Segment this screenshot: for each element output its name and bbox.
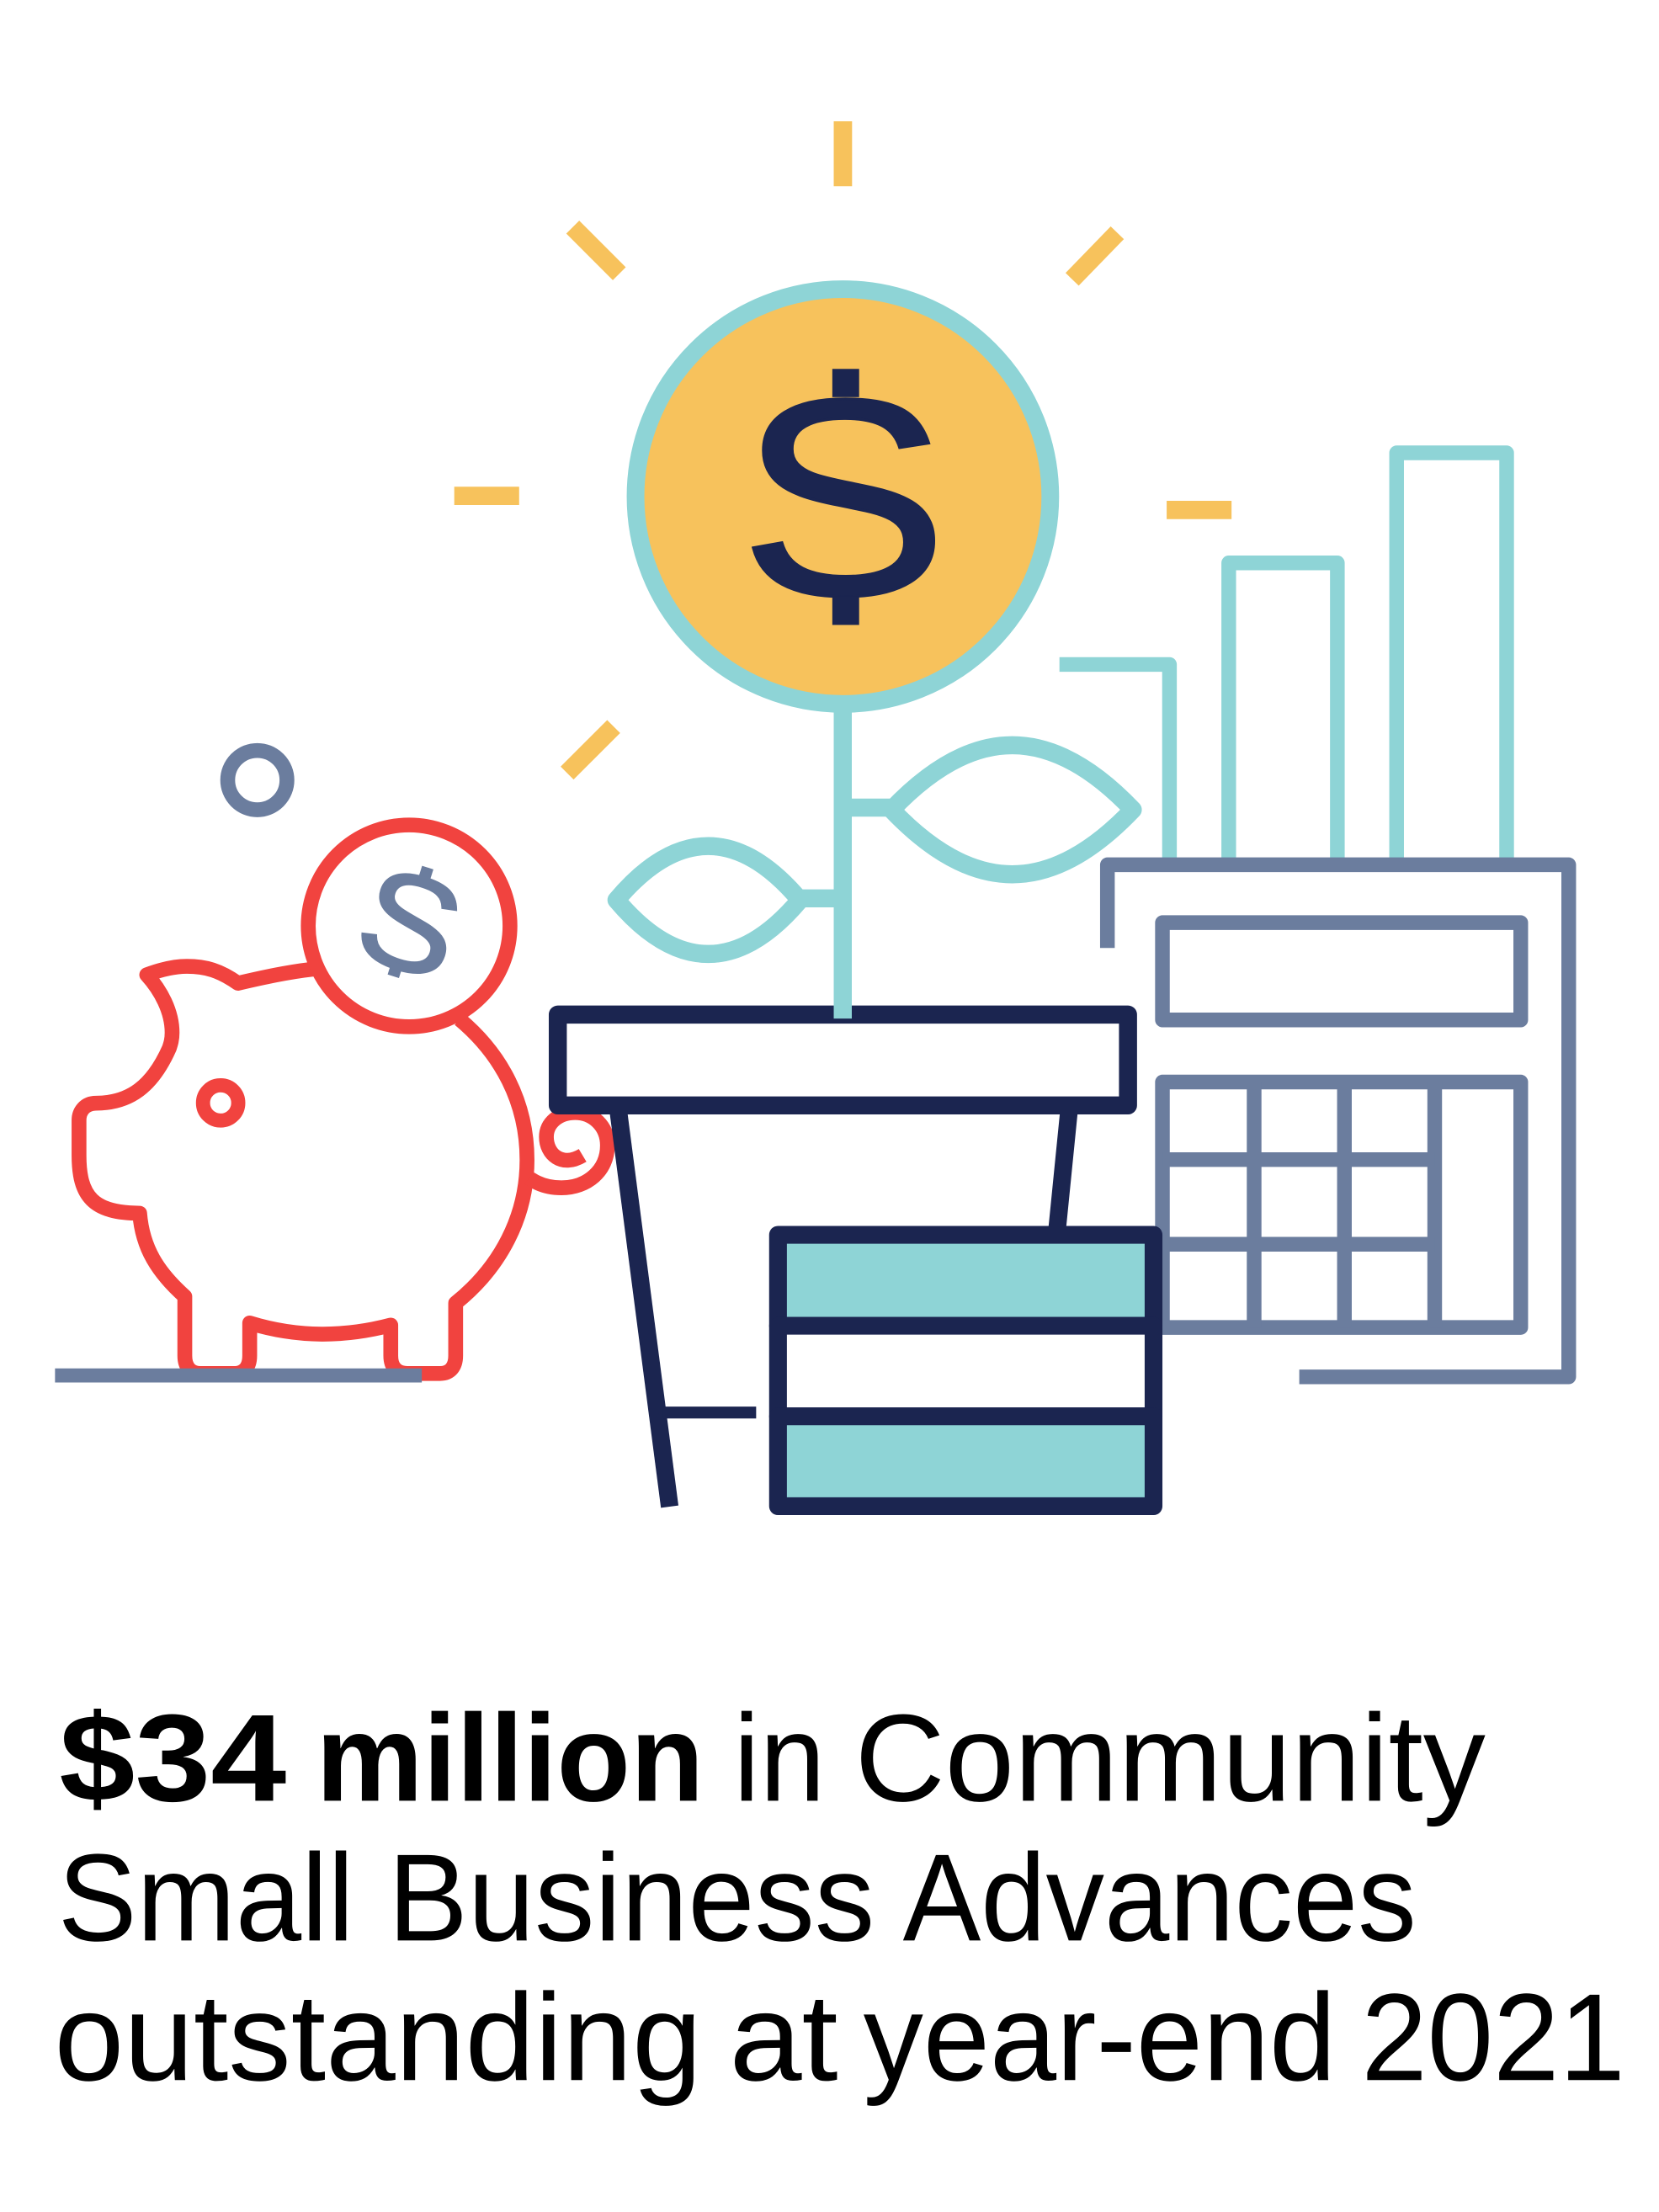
coin entering the piggy bank (308, 825, 510, 1027)
caption text: in (734, 1688, 825, 1827)
icon: calculator (1108, 864, 1569, 1377)
bar chart outline (1060, 453, 1507, 864)
caption text (55, 1688, 1625, 2107)
icon: plant stem and leaves (616, 705, 1133, 1018)
caption text: Community (855, 1688, 1486, 1827)
icon: dollar sign: S (739, 341, 948, 653)
coin entering the piggy bank: S (341, 837, 480, 1010)
icon: small floating circle (228, 751, 287, 810)
icon: flower pot (558, 1014, 1128, 1507)
icon: stack of bills (778, 1235, 1153, 1506)
caption text: Business (388, 1828, 875, 1967)
piggy eye (203, 1085, 238, 1120)
icon: piggy bank (79, 825, 608, 1374)
caption text: outstanding (55, 1968, 702, 2107)
caption text: $34 (59, 1688, 286, 1827)
caption text: Small (58, 1828, 354, 1967)
piggy tail (529, 1113, 608, 1188)
icon: dollar coin flower (635, 290, 1050, 704)
caption text: Advances (903, 1828, 1417, 1967)
caption text: year-end (864, 1968, 1336, 2107)
caption text: at (730, 1968, 838, 2107)
ground line (55, 1369, 422, 1382)
caption text: million (316, 1688, 704, 1827)
caption text: 2021 (1361, 1968, 1625, 2107)
piggy body outline (79, 966, 527, 1374)
icon: sun rays (455, 121, 1231, 773)
